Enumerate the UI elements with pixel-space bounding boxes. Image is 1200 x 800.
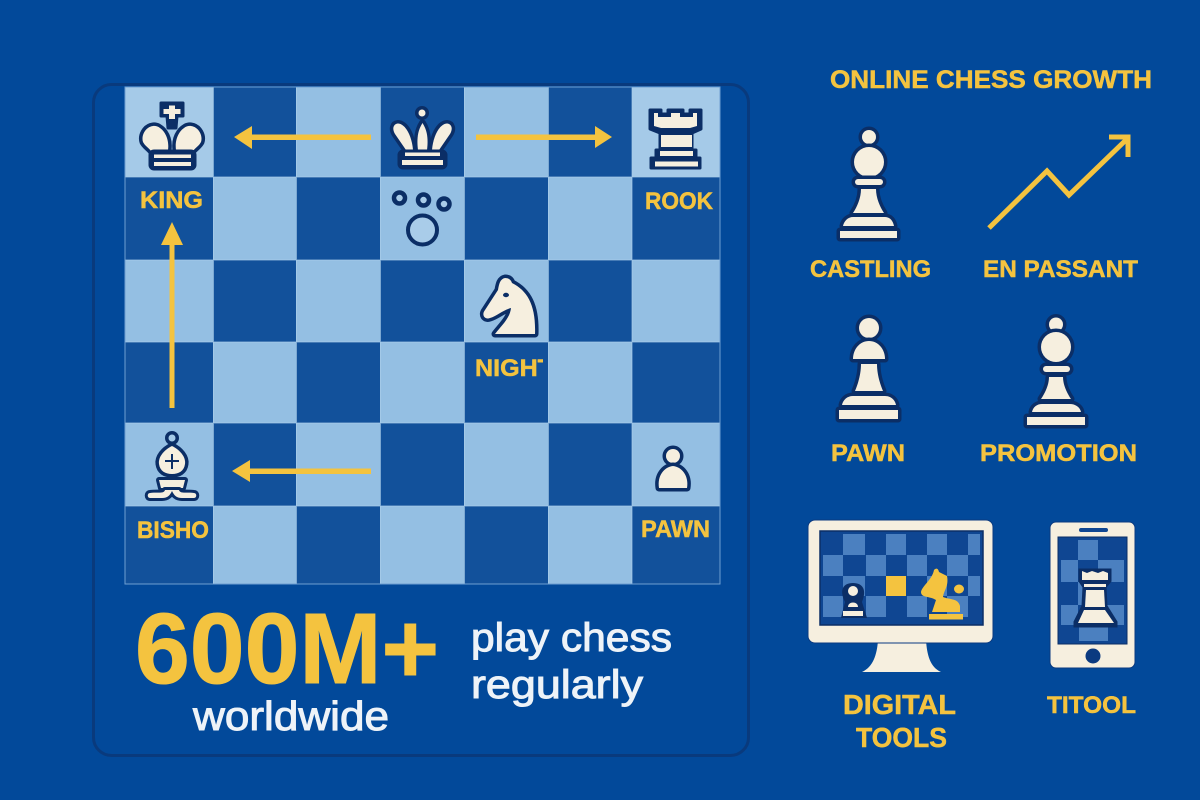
icon: promotion piece <box>1027 318 1085 425</box>
icon: move dots <box>394 192 450 244</box>
icon: knight <box>483 278 535 334</box>
arrow: queen to rook <box>476 126 612 148</box>
label: phone tool: TITOOL <box>1047 692 1136 719</box>
label: rook: ROOK <box>645 188 714 215</box>
icon: board pawn <box>659 449 687 488</box>
text: regularly: regularly <box>471 663 643 707</box>
icon: castling piece <box>840 130 897 238</box>
icon: queen <box>393 110 452 168</box>
label: castling: CASTLING <box>810 256 931 283</box>
icon: rook <box>650 110 701 168</box>
label: en passant: EN PASSANT <box>983 256 1138 283</box>
label: pawn: PAWN <box>831 440 905 467</box>
panel: chess board card <box>94 84 748 756</box>
icon: king <box>142 103 202 169</box>
arrow: queen to king <box>234 126 371 149</box>
label: knight (clipped): NIGHT <box>475 355 553 382</box>
icon: desktop monitor <box>808 520 993 672</box>
icon: pawn <box>839 318 898 419</box>
arrow: up to king <box>161 222 183 408</box>
arrow: to bishop <box>232 460 371 482</box>
text: worldwide: worldwide <box>192 693 389 739</box>
chess board <box>125 87 720 584</box>
label: digital tools: DIGITAL <box>843 689 956 720</box>
icon: growth trend arrow <box>989 137 1128 228</box>
label: bishop: BISHO <box>137 517 209 544</box>
label: king: KING <box>140 187 203 214</box>
label: digital tools: TOOLS <box>856 722 947 753</box>
label: promotion: PROMOTION <box>980 440 1137 467</box>
stat: 600M+: 600M+ <box>135 593 439 705</box>
label: digital tools <box>843 689 956 753</box>
heading: online chess growth: ONLINE CHESS GROWTH <box>830 66 1152 94</box>
text: play chess: play chess <box>471 616 672 660</box>
icon: bishop <box>148 434 196 498</box>
icon: smartphone <box>1050 522 1135 668</box>
label: pawn on board: PAWN <box>641 516 710 543</box>
